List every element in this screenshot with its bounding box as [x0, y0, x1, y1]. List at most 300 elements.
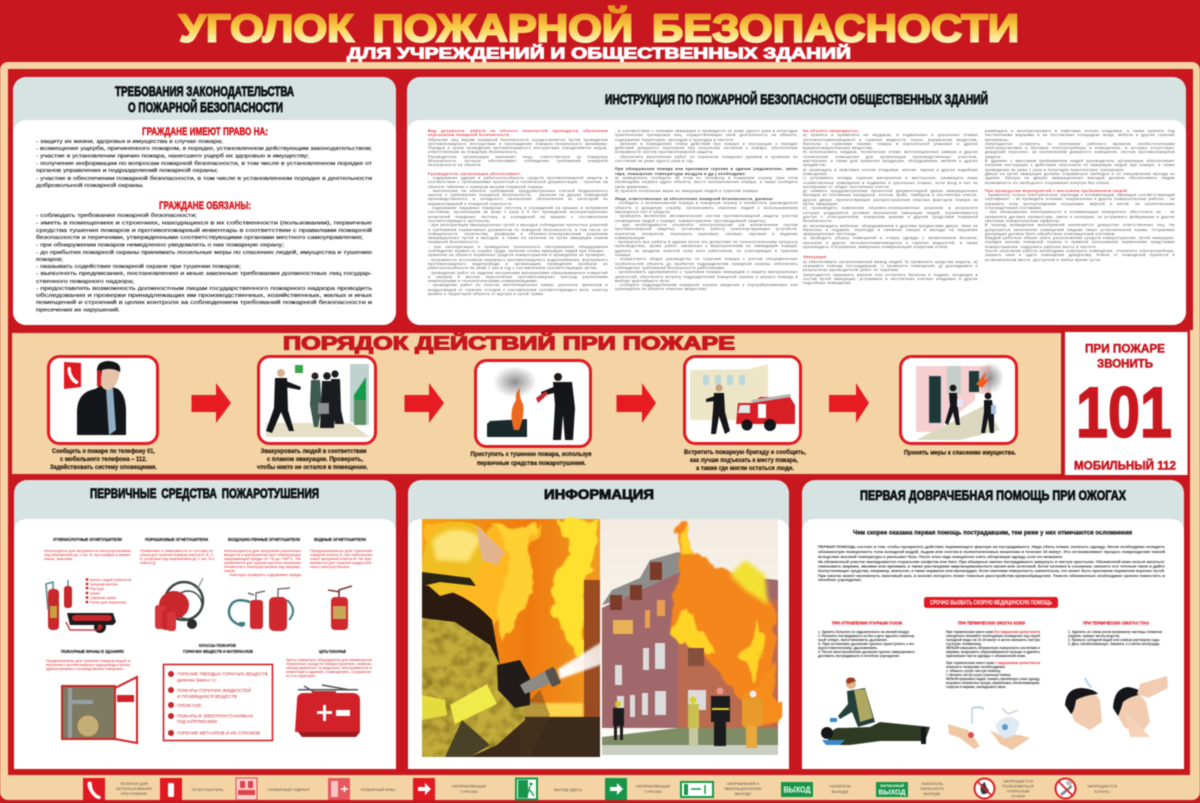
label: emergency exit: ЗАПАСНОГО — [920, 786, 944, 791]
section: skin burns: спиртом и жирами, накладывать мази. — [946, 685, 1006, 689]
text column 1: - проведение работ по очистке вентиляционных камер, циклонов, фильтров и воздуховодов от горючих отходов с составлением соответствующего акта; очистку кровли и территории объекта от мусора и сухой травы. — [428, 283, 608, 296]
step 4 caption: а также где могли остаться люди. — [696, 465, 794, 472]
panel: action order band — [12, 332, 1061, 474]
sign: extinguisher — [160, 778, 182, 800]
step 1 card — [48, 356, 158, 444]
section: carbon monoxide poisoning: ПРИ ОТРАВЛЕНИИ УГАРНЫМ ГАЗОМ — [832, 620, 902, 626]
subheading: citizens' duties: ГРАЖДАНЕ ОБЯЗАНЫ: — [159, 200, 251, 212]
section: fire shields: низированного пожарного инструмента и — [286, 666, 372, 670]
section: fire hydrants in buildings: ПОЖАРНЫЕ КРАНЫ В ЗДАНИЯХ — [61, 649, 125, 654]
list: fire classes: (древесина, бумага и т.п.) — [177, 678, 216, 682]
section: carbon monoxide poisoning: 4. После восстановления дыхания срочно эвакуировать — [818, 650, 916, 654]
call text: ЗВОНИТЬ — [1097, 358, 1153, 370]
text column 4: - при обнаружении неисправности в иллюминации немедленно обесточить ее; - не применять дуговые прожекторы, свечи и хлопушки, не устраивать фейерверки и другие световые пожароопасные эффекты; — [985, 210, 1175, 223]
title: УГОЛОК ПОЖАРНОЙ БЕЗОПАСНОСТИ — [179, 6, 1019, 50]
panel: first aid for burns — [802, 480, 1184, 769]
section: skin burns: кожного покрова необходимо: — [946, 665, 1006, 669]
section: foam extinguishers: Используются для загорания различных — [224, 549, 301, 553]
step 1 caption: с мобильного телефона – 112. — [60, 456, 147, 463]
text column 3: д) снимать предусмотренные проектной документацией двери эвакуационных выходов из поэтажных коридоров, холлов, фойе, тамбуров и лестничных клеток, другие двери, препятствующие распространению опасных факторов пожара на путях эвакуации; — [803, 189, 978, 206]
grey window — [947, 366, 961, 394]
icon: burning window with smoke — [969, 362, 1004, 394]
section: eye burns: 1. Удалить из глаза (если возможно) частицы пламени — [1068, 630, 1163, 634]
sign: hydrant — [236, 778, 257, 800]
legend: extinguisher parts: Сифонная трубка — [90, 596, 117, 600]
section: skin burns: вскрывать обожженные пузыри, обрабатывать обезболивающими, — [946, 681, 1040, 685]
section: powder extinguishers: Применяют в зависимости от состава по- — [140, 549, 215, 553]
step 2 caption: Эвакуировать людей в соответствии — [260, 448, 367, 455]
section: powder extinguishers — [140, 537, 215, 631]
panel: legal requirements — [13, 77, 396, 325]
subheading: first aid: Чем скорее оказана первая помощь пострадавшим, тем реже у них отмечаются осложнения — [853, 530, 1132, 536]
text column 2: - осуществить общее руководство по тушению пожара с учетом специфических особенностей объекта до прибытия подразделения пожарной охраны; обеспечить соблюдение требований безопасности работниками; — [615, 257, 798, 270]
list: fire classes — [168, 671, 268, 736]
label: fire hose: ПОЖАРНЫЙ КРАН — [361, 787, 396, 792]
step 1 caption — [50, 448, 157, 471]
text column 3 — [803, 129, 978, 315]
text column 3: г) устраивать склады горючих материалов и мастерские, размещать иные хозяйственные помещения в подвалах и цокольных этажах, если вход в них не изолирован от общих лестничных клеток; — [803, 176, 978, 189]
list: fire classes: ГОРЕНИЕ ТВЕРДЫХ ГОРЮЧИХ ВЕЩЕСТВ — [177, 672, 268, 676]
step 2 caption: с планом эвакуации. Проверить, — [267, 456, 363, 463]
label: exit here: ВЫХОД ЗДЕСЬ — [554, 787, 582, 792]
text column 2: - обеспечить выполнение работ по перекатке пожарных рукавов и проверке их состояния не реже одного раза в год. — [615, 155, 798, 163]
callout: call ambulance: СРОЧНО ВЫЗВАТЬ СКОРУЮ МЕДИЦИНСКУЮ ПОМОЩЬ — [930, 600, 1052, 606]
text column 3: в) размещать в лифтовых холлах кладовые, киоски, ларьки и другие подобные помещения; — [803, 168, 978, 176]
section: water extinguishers: газа и электроустановок. — [310, 565, 350, 569]
section: skin burns: При термическом ожоге кожи с нарушением целостности — [946, 661, 1041, 665]
step 5 caption: Принять меры к спасению имущества. — [904, 450, 1016, 456]
section: CO2 extinguishers — [44, 537, 132, 633]
section: eye burns: (окурков, горящих частиц веществ). — [1068, 634, 1120, 638]
step 5 card — [900, 356, 1016, 444]
label: evacuation exit: НАПРАВЛЕНИЕ К — [727, 781, 760, 786]
icon: water extinguisher — [328, 586, 352, 630]
section: fire hydrants in buildings — [46, 649, 137, 743]
text column 1: - содержание здания и работоспособность средств противопожарной защиты в соответствии с требованиями проектной и технической документации; - наличие на объекте табличек с номером вызова пожарной охраны; — [428, 176, 608, 189]
icon: evacuating group — [310, 370, 344, 428]
icon: exit sign — [295, 365, 303, 373]
section: foam extinguishers: нием. — [224, 569, 236, 573]
section: skin burns: ПРИ ТЕРМИЧЕСКИХ ОЖОГАХ КОЖИ — [958, 620, 1025, 626]
text column 1: - при эксплуатации эвакуационных путей и выходов соблюдение проектных решений и требований нормативных документов по пожарной безопасности, в том числе по освещенности, количеству, размерам и объемно-планировочным решениям эвакуационных путей и выходов, а также по наличию на путях эвакуации знаков пожарной безопасности; — [428, 223, 608, 244]
text block: duties list: пресечения их нарушений. — [36, 306, 120, 314]
arrow 4 — [829, 383, 869, 423]
heading: action order: ПОРЯДОК ДЕЙСТВИЙ ПРИ ПОЖАРЕ — [283, 332, 735, 354]
section: skin burns: немедленно начинайте необходимую охлаждение под струей — [946, 634, 1041, 638]
sign: exit: ВЫХОД — [784, 786, 811, 794]
section: powder extinguishers: рошка для тушения пожаров классов А, В, С, — [140, 553, 214, 557]
section: eye burns: 2. Промыть холодной водой или слабым раствором соды. — [1068, 638, 1160, 642]
label: no smoking — [1087, 784, 1117, 794]
step 3 caption: первичные средства пожаротушения. — [477, 460, 586, 467]
text block: duties list: - иметь в помещениях и строениях, находящихся в их собственности (пользовании), первичные — [36, 220, 372, 226]
icon: phone sign — [64, 362, 81, 389]
label: emergency exit: УКАЗАТЕЛЬ — [921, 781, 943, 786]
section: carbon monoxide poisoning: 2. Положить пострадавшего на бок и дать вдыхать нашатыр- — [818, 634, 916, 638]
arrow 3 — [616, 383, 656, 423]
text column 2: - прекратить все работы в здании (если это допустимо по технологическому процессу производства), кроме работ, связанных с мероприятиями по ликвидации пожара; удалить за пределы опасной зоны всех работников, не участвующих в тушении пожара; — [615, 240, 798, 257]
legend: extinguisher parts: Шланг — [90, 592, 101, 596]
illustration: hand under water and bandage — [948, 707, 1030, 750]
text column 3: Запрещается закрывать жалюзи или остеклять балконы и лоджии, входящие в состав путей эвакуации, устраивать в лестничных клетках кладовые и другие подсобные помещения. — [803, 272, 978, 285]
sign: green arrow — [605, 778, 627, 800]
text column 1: - при эксплуатации и проведении технического обслуживания оборудования соблюдение правил по охране труда, наличие схемы эвакуации людей при пожаре; - хранение на объекте первичных средств пожаротушения и проведение их проверки; — [428, 245, 608, 257]
legend: extinguisher parts: Ручка для переноски — [90, 600, 126, 604]
icon: smoke — [493, 366, 537, 398]
text column 1 — [428, 129, 608, 315]
step 2 caption — [257, 448, 368, 471]
section: carbon monoxide poisoning: 3. При остановке дыхания срочно приступить к ис- — [818, 642, 916, 646]
text block: first aid intro: болеутоляющие средства, например, анальгин, а также корвалол или валокордин. Если ожоговая поверхность значительна, это может быть признаком поражения верхних путей. — [818, 569, 1165, 573]
section: fire hydrants in buildings: Предназначены для тушения пожаров водой от — [46, 659, 131, 663]
heading: legal requirements: О ПОЖАРНОЙ БЕЗОПАСНОСТИ — [128, 98, 283, 115]
section: eye burns: ПРИ ТЕРМИЧЕСКИХ ОЖОГАХ ГЛАЗ — [1083, 620, 1149, 626]
section: foam extinguishers: применяются для тушения щелочно-земельных — [224, 561, 301, 565]
section: CO2 extinguishers: УГЛЕКИСЛОТНЫЕ ОГНЕТУШИТЕЛИ — [53, 537, 122, 542]
text block: rights list: - возмещение ущерба, причиненного пожаром, в порядке, установленном действующим законодательством; — [36, 145, 373, 152]
text column 4: В зданиях с массовым пребыванием людей руководитель организации обеспечивает наличие инструкции о действиях персонала по эвакуации людей при пожаре, а также проведение не реже 1 раза в полугодие практических тренировок. — [985, 159, 1175, 172]
label: green arrow: НАПРАВЛЯЮЩАЯ — [636, 784, 670, 788]
text column 2: - организовать одновременно с тушением пожара эвакуацию и защиту материальных ценностей; обеспечить встречу подразделений пожарной охраны и оказать помощь в выборе кратчайшего пути; — [615, 270, 798, 283]
room floor — [916, 405, 1000, 440]
list: fire classes: ПОЖАРЫ В ЭЛЕКТРОУСТАНОВКАХ — [177, 714, 253, 718]
text block: rights list: органов управления и подразделений пожарной охраны; — [36, 167, 219, 174]
section: eye burns — [1065, 620, 1168, 737]
sign: emergency exit: ВЫХОД — [878, 790, 906, 796]
label: red arrow: СТРЕЛКА — [460, 789, 478, 794]
label: green arrow: СТРЕЛКА — [644, 789, 662, 794]
text column 1: - исправность источников наружного противопожарного водоснабжения, внутреннего противопожарного водопровода и организацию проведения проверок их работоспособности не реже 2 раз в год с составлением соответствующих актов; — [428, 258, 608, 270]
text column 4: размещать и эксплуатировать в лифтовых холлах кладовые, а также хранить под лестничными маршами и на лестничных площадках вещи, мебель и другие горючие материалы. — [985, 129, 1175, 142]
text block: first aid intro: При ожогах может возникнуть ожоговый шок, в основе которого лежат тяжелые расстройства кровообращения. Тяжело обожженных необходимо срочно поместить в — [818, 574, 1166, 578]
text block: first aid intro: лечебное учреждение. — [818, 578, 862, 582]
section: CO2 extinguishers: под напряжением до 1 тыс. В, при пожарах в машин- — [44, 553, 132, 557]
heading: information: ИНФОРМАЦИЯ — [544, 486, 654, 502]
label: no open fire: ЗАПРЕЩАЕТСЯ — [1003, 778, 1033, 784]
text block: rights list: - защиту их жизни, здоровья и имущества в случае пожара; — [36, 139, 224, 145]
heading: instruction: ИНСТРУКЦИЯ ПО ПОЖАРНОЙ БЕЗОПАСНОСТИ ОБЩЕСТВЕННЫХ ЗДАНИЙ — [605, 90, 988, 107]
mobile number: МОБИЛЬНЫЙ 112 — [1074, 460, 1176, 472]
section: fire shields: ях и на территории. — [286, 674, 316, 678]
label: no open fire: ОТКРЫТЫМ — [1007, 788, 1029, 794]
label: evacuation exit: ВЫХОДУ — [735, 791, 752, 796]
sign: no open fire — [974, 778, 994, 798]
text column 1: - выполнение на объекте требований, предусмотренных статьей Федерального закона о требованиях пожарной безопасности; - наличие на дверях помещений производственного и складского назначения обозначения их категорий по взрывопожарной и пожарной опасности; — [428, 189, 608, 206]
label: fire phone: ТЕЛЕФОН ДЛЯ — [120, 781, 148, 786]
heading: first aid: ПЕРВАЯ ДОВРАЧЕБНАЯ ПОМОЩЬ ПРИ ОЖОГАХ — [860, 487, 1127, 503]
label: hydrant: ПОЖАРНЫЙ ГИДРАНТ — [268, 787, 311, 792]
illustration: face with eye rinse — [1065, 676, 1168, 737]
text column 3: а) обеспечивать организованный вывод людей, б) применять средства защиты, в) оказывать помощь пострадавшим, г) проверять помещения, д) докладывать о результатах руководителю работ по тушению. — [803, 260, 978, 272]
section: CO2 extinguishers: Используются для загорания на электроустановках — [44, 549, 131, 553]
section: water extinguishers: Предназначены для тушения — [310, 549, 372, 553]
text block: duties list: - до прибытия пожарной охраны принимать посильные меры по спасению людей, имущества и тушению — [36, 249, 372, 256]
icon: foam extinguishers — [229, 588, 293, 631]
section: foam extinguishers: элементов и электроустановок под напряже- — [224, 565, 302, 569]
legend: extinguisher parts: Раструб — [90, 587, 104, 591]
sign: exit — [781, 782, 813, 797]
sign: emergency exit — [876, 782, 908, 797]
text column 2: При обнаружении пожара или признаков горения в здании (задымление, запах гари, повышение температуры воздуха и др.) необходимо: — [615, 167, 798, 176]
text column 2: - проверить включение автоматических систем противопожарной защиты (систем оповещения людей о пожаре, пожаротушения, противодымной защиты); — [615, 214, 798, 223]
label: extinguisher: ОГНЕТУШИТЕЛЬ — [192, 787, 224, 792]
text column 3: з) проводить уборку помещений и стирку одежды с применением бензина, керосина и других легковоспламеняющихся и горючих жидкостей, а также производить отогревание замерзших коммуникаций открытым огнем; — [803, 236, 978, 249]
sign: fire phone — [83, 778, 105, 800]
text block: first aid intro — [818, 545, 1166, 582]
text column 3: ж) загромождать мебелью, оборудованием и другими предметами двери, люки на балконах и лоджиях, переходы в смежные секции и выходы на наружные эвакуационные лестницы; — [803, 224, 978, 236]
list: fire classes: ГОРЕНИЕ ГАЗОВ — [177, 703, 201, 708]
text column 1: Руководитель организации назначает лицо, ответственное за пожарную безопасность, которое обеспечивает соблюдение требований пожарной безопасности на объекте. — [428, 155, 608, 167]
label: no open fire — [1002, 778, 1034, 798]
label: no open fire: ПОЛЬЗОВАТЬСЯ — [1002, 784, 1034, 788]
text column 1: Вид документа: работа на объекте опасностей проводится обученным персоналом пожарной безопасности. — [428, 129, 608, 137]
text block: duties list: - соблюдать требования пожарной безопасности; — [36, 212, 198, 219]
text column 2: - в соответствии с планами эвакуации и проводится не реже одного раза в полугодие практическая тренировка лиц, осуществляющих свою деятельность на объекте; содержание территории, проходов и проездов в чистоте. — [615, 129, 798, 142]
text block: rights list: добровольной пожарной охраны. — [36, 182, 144, 189]
text block: duties list — [36, 212, 372, 314]
text block: first aid intro: обожженную поверхность тела холодной водой, льдом или снегом в полиэтиленовых мешочках в течение 10 минут. Это останавливает процесс повреждения тканей — [818, 550, 1166, 554]
callout: call ambulance — [924, 597, 1058, 608]
text block: first aid intro: На обожженный участок накладывается стерильная салфетка или бинт. При обширных ожогах пострадавшего завернуть в чистую простыню. Обожженной кожи нельзя касаться: — [818, 560, 1165, 564]
icon: dark door — [929, 376, 941, 423]
text block: first aid intro: вследствие высокой температуры и уменьшает боль. После этого надо немедленно снять обгоревшую одежду, если это возможно. — [818, 555, 1063, 559]
section: skin burns: прилипшие части одежды с обожженной кожи. — [946, 654, 1026, 658]
list: fire classes: ПОД НАПРЯЖЕНИЕМ — [177, 719, 217, 724]
step 3 card — [476, 360, 590, 446]
section: fire shields: ЩИТЫ ПОЖАРНЫЕ — [319, 649, 346, 654]
room wall — [916, 366, 991, 432]
section: skin burns: НЕЛЬЗЯ промывать водой, снимать прилипшую к коже одежду, — [946, 677, 1040, 681]
firefighter body — [422, 617, 525, 757]
text column 4 — [985, 129, 1175, 315]
text column 2: Лица, ответственные за обеспечение пожарной безопасности, должны: — [615, 197, 774, 201]
label: no smoking: КУРИТЬ — [1094, 789, 1110, 794]
icon: door — [350, 364, 369, 425]
section: skin burns: При термическом ожоге кожи без нарушения целостности — [946, 630, 1041, 634]
section: water extinguishers: ВОДНЫЕ ОГНЕТУШИТЕЛИ — [314, 537, 366, 542]
label: exit: ВЫХОДА — [832, 789, 849, 794]
arrow 2 — [404, 383, 444, 423]
section: skin burns — [945, 620, 1041, 750]
section: eye burns: 3. Дать обезболивающее. Закапать 1-2 капли альбуцида. — [1068, 642, 1160, 646]
icon: CO2 extinguishers — [46, 580, 116, 633]
section: water extinguishers — [310, 537, 373, 630]
text column 2: - сообщать подразделениям пожарной охраны сведения о перерабатываемых или хранящихся на объекте опасных веществах. — [615, 283, 798, 291]
text block: duties list: помещений и строений в целях контроля за соблюдением требований пожарной безопасности и — [36, 299, 372, 306]
text block: duties list: ственного пожарного надзора; — [36, 279, 135, 285]
text block: duties list: - выполнять предписания, постановления и иные законные требования должностных лиц государ- — [36, 271, 372, 277]
icon: man with extinguisher — [536, 373, 575, 440]
text block: duties list: - предоставлять возможность должностным лицам государственного пожарного надзора проводить — [36, 286, 372, 292]
section: fire shields: инвентаря в зданиях, помещениях, сооружени- — [286, 670, 373, 674]
glove and nozzle — [497, 660, 530, 708]
section: fire shields — [286, 649, 373, 737]
section: foam extinguishers: Ежегодно проверять содержимое заряда — [230, 573, 302, 577]
label: no open fire: ОГНЕМ — [1011, 794, 1025, 798]
section: fire classes — [164, 643, 272, 740]
panel: fire safety instruction — [407, 77, 1186, 325]
icon: people carrying property — [945, 385, 996, 433]
step 1 caption: Задействовать систему оповещения. — [50, 464, 157, 471]
text column 4: Запрещается оставлять по окончании рабочего времени необесточенными электроустановки и бытовые электроприборы в помещениях, в которых отсутствует дежурный персонал, за исключением дежурного освещения, систем противопожарной защиты. — [985, 142, 1175, 159]
section: fire shields: Щиты пожарные оборудуются для размещения — [286, 658, 372, 662]
section: skin burns: жирами, вскрывать образовавшиеся пузыри и удалять — [945, 650, 1041, 654]
text column 2: - сообщить о возникновении пожара в пожарную охрану и оповестить руководителя объекта и дежурную службу; организовать спасение людей с использованием имеющихся сил и средств; — [615, 201, 798, 214]
legend: extinguisher parts — [86, 578, 131, 604]
sign: no smoking — [1056, 778, 1076, 798]
text column 4: Двери на путях эвакуации должны открываться свободно и по направлению выхода из здания. Запоры на дверях эвакуационных выходов должны обеспечивать людям возможность их свободного открывания изнутри без ключа. — [985, 172, 1175, 185]
sign: exit here — [516, 778, 537, 800]
icon: hydrant cabinet — [62, 677, 137, 743]
legend: extinguisher parts: Баллон с жидкой углекислотой — [90, 578, 131, 582]
text column 4: Каждый работник обязан знать расположение средств пожаротушения, путей эвакуации, порядок вызова пожарной охраны и правила пользования первичными средствами пожаротушения, содержать рабочее место в чистоте. — [985, 236, 1175, 249]
section: carbon monoxide poisoning — [818, 620, 930, 745]
section: powder extinguishers: ПОРОШКОВЫЕ ОГНЕТУШИТЕЛИ — [145, 537, 208, 542]
section: foam extinguishers — [224, 537, 302, 631]
label: green arrow — [636, 784, 670, 794]
call text — [1085, 344, 1165, 370]
sign: evacuation exit — [681, 782, 713, 797]
icon: burning box — [487, 388, 527, 437]
section: carbon monoxide poisoning: ный спирт, восстановить дыхание. — [818, 638, 888, 642]
text block: first aid intro: ПЕРВАЯ ПОМОЩЬ состоит в том, чтобы прекратить действие поражающего фактора на пострадавшего. Надо сбить пламя, погасить одежду. Затем необходимо охладить — [818, 545, 1166, 549]
section: carbon monoxide poisoning: доставить пострадавшего в лечебное учреждение. — [818, 654, 900, 658]
label: emergency exit: ВЫХОДА — [924, 791, 941, 796]
text block: duties list: безопасности и перечнями, утвержденными соответствующими органами местного самоуправления; — [36, 235, 364, 241]
list: fire classes: И ПЛАВЯЩИХСЯ ВЕЩЕСТВ — [177, 694, 237, 699]
call text: ПРИ ПОЖАРЕ — [1085, 344, 1165, 356]
legend: extinguisher parts: Запорный вентиль — [90, 582, 118, 586]
text column 1: Обучение лиц мерам пожарной безопасности осуществляется путем проведения противопожарного инструктажа и прохождения пожарно-технического минимума. Порядок и сроки проведения противопожарного инструктажа определяются лицом, ответственным за пожарную безопасность. — [428, 138, 608, 154]
photo: burning building — [600, 519, 778, 755]
section: fire classes: КЛАССЫ ПОЖАРОВ — [199, 643, 237, 648]
text column 2 — [615, 129, 798, 315]
illustration: resuscitation — [821, 678, 930, 745]
text block: rights list: - участие в установлении причин пожара, нанесшего ущерб их здоровью и имуществу; — [36, 154, 310, 160]
text column 3: а) хранить и применять на чердаках, в подвальных и цокольных этажах легковоспламеняющиеся и горючие жидкости, порох, взрывчатые вещества, баллоны с горючими газами, товары в аэрозольной упаковке и другие взрывопожароопасные вещества; — [803, 133, 978, 150]
label: red arrow: НАПРАВЛЯЮЩАЯ — [452, 784, 486, 788]
text column 3: Эвакуация: — [803, 255, 828, 259]
label: fire phone: ПРИ ПОЖАРЕ — [121, 791, 148, 796]
legend: safety signs — [83, 778, 1117, 800]
text column 3: б) использовать чердаки, технические этажи, вентиляционные камеры и другие технические помещения для организации производственных участков, мастерских, а также для хранения продукции, оборудования, мебели и других предметов; — [803, 150, 978, 167]
section: powder extinguishers: класса Д. — [140, 561, 156, 565]
section: foam extinguishers: веществ и материалов при температуре — [224, 553, 301, 557]
section: carbon monoxide poisoning: 1. Удалить больного из задымленного на свежий воздух. — [818, 630, 910, 634]
text column 1: - содержание наружных пожарных лестниц и ограждений на крышах в исправном состоянии, организацию не реже 1 раза в 5 лет проведения эксплуатационных испытаний пожарных лестниц и ограждений на крышах с составлением соответствующего протокола; — [428, 206, 608, 223]
label: fire phone — [116, 781, 152, 796]
text block: rights list: - получение информации по вопросам пожарной безопасности, в том числе в установленном порядке от — [36, 160, 373, 167]
step 3 caption: Приступить к тушению пожара, используя — [470, 451, 592, 458]
text block: first aid intro: смазывать жирами, мазями или кремами, а также растворами марганцовокислого калия или зеленкой. Если человек в сознании, напоите его теплым чаем и дайте — [818, 564, 1165, 568]
icon: building — [690, 364, 768, 420]
icon: walking man — [266, 369, 301, 433]
icon: powder extinguishers — [155, 578, 203, 631]
text column 2: - при необходимости отключить электроэнергию (за исключением систем противопожарной защиты), остановить работу транспортирующих устройств, агрегатов, аппаратов, перекрыть сырьевые, газовые, паровые и водяные коммуникации; — [615, 223, 798, 240]
section: water extinguishers: меняются для тушения жидкостей, — [310, 561, 372, 565]
section: skin burns: НЕЛЬЗЯ смазывать обожженную поверхность кислотами и — [946, 646, 1041, 650]
step 3 caption — [470, 451, 592, 467]
text column 2: б) принять посильные меры по эвакуации людей и тушению пожара. — [615, 189, 759, 193]
step 2 caption: чтобы никто не остался в помещении. — [257, 464, 368, 471]
section: powder extinguishers: Е, установок под напряжением до 1 тыс. В и — [140, 557, 214, 561]
icon: man phoning — [77, 361, 126, 435]
number 101: 101 — [1076, 374, 1172, 453]
section: foam extinguishers: окружающей среды от +5 до +50°С. Не — [224, 557, 301, 561]
ground — [602, 728, 778, 755]
firefighters on ground — [613, 688, 763, 748]
label: emergency exit — [920, 781, 944, 796]
section: skin burns: 1. Обмыть сухую чистую повязку. — [946, 669, 1001, 673]
floor — [266, 423, 370, 437]
section: CO2 extinguishers: ных залах. — [44, 557, 74, 561]
section: skin burns: сухую повязку. — [946, 642, 982, 646]
text column 1: Руководитель организации обеспечивает: — [428, 172, 522, 176]
text column 2: - наличие в помещениях плана действий при пожаре и инструкции о порядке действий дежурного персонала при получении сигналов о пожаре; обеспечение исправности систем противопожарной защиты. — [615, 142, 798, 154]
label: evacuation exit — [724, 781, 763, 796]
step 2 card — [258, 356, 376, 444]
text column 4: После окончания работы необходимо осмотреть помещение, отключить электроприборы, закрыть окна и сдать помещение дежурному. Ключи от помещений хранятся в установленном месте, доступном в любое время суток. — [985, 249, 1175, 262]
text block: duties list: - при обнаружении пожаров немедленно уведомлять о них пожарную охрану; — [36, 242, 285, 248]
sign: emergency exit: ЗАПАСНЫЙ — [880, 784, 905, 788]
section: skin burns: холодной воды на 10-15 минут и затем наложить чистую — [946, 638, 1040, 642]
heading: legal requirements: ТРЕБОВАНИЯ ЗАКОНОДАТЕЛЬСТВА — [115, 83, 294, 99]
text block: duties list: пожаров; — [36, 257, 64, 263]
subheading: citizens' rights: ГРАЖДАНЕ ИМЕЮТ ПРАВО НА: — [142, 126, 268, 138]
text column 2: а) немедленно сообщить об этом по телефону в пожарную охрану (при этом необходимо назвать адрес объекта, место возникновения пожара, а также сообщить свою фамилию); — [615, 176, 798, 189]
panel: primary fire extinguishing means — [14, 480, 396, 769]
section: water extinguishers: пожаров класса А; при небольшом — [310, 553, 372, 557]
text block: rights list: - участие в обеспечении пожарной безопасности, в том числе в установленном порядке в деятельности — [36, 175, 372, 182]
section: carbon monoxide poisoning: кусственному дыханию. — [818, 646, 878, 650]
text column 4: В период проведения мероприятий назначается дежурство ответственных лиц. Не допускается заполнение помещений людьми сверх установленной нормы. Сгораемые декорации должны быть обработаны огнезащитным составом. — [985, 223, 1175, 236]
step 4 caption: как лучше подъехать к месту пожара, — [690, 457, 798, 464]
water jet — [558, 605, 666, 679]
text column 1: - проведение работ по заделке негорючими материалами образовавшихся отверстий и зазоров в местах пересечения противопожарных преград различными инженерными и технологическими коммуникациями; — [428, 270, 608, 283]
list: fire classes: ГОРЕНИЕ МЕТАЛЛОВ И ИХ СПЛАВОВ — [177, 730, 260, 736]
icon: fire truck — [736, 394, 795, 431]
text block: rights list — [36, 139, 373, 189]
sign: red arrow — [413, 778, 435, 800]
text block: duties list: обследования и проверки принадлежащих им производственных, хозяйственных, жилых и иных — [36, 292, 372, 299]
windows — [613, 600, 706, 718]
text column 4: - применять только электрические гирлянды и иллюминацию, имеющие соответствующий сертификат; - не проводить огневые, покрасочные и другие пожароопасные работы; - не украшать елку целлулоидными игрушками, марлей и ватой, не пропитанными огнезащитными составами; — [985, 193, 1175, 210]
label: fire phone: ИСПОЛЬЗОВАНИЯ — [116, 786, 152, 791]
text block: duties list: - оказывать содействие пожарной охране при тушении пожаров; — [36, 263, 242, 270]
section: water extinguishers: очаге загорания класса В. Не при- — [310, 557, 373, 561]
section: fire classes: ГОРЮЧИХ ВЕЩЕСТВ И МАТЕРИАЛОВ — [183, 649, 254, 654]
label: no smoking: ЗАПРЕЩАЕТСЯ — [1087, 784, 1117, 788]
panel: emergency number — [1065, 332, 1188, 475]
text column 3: е) производить изменения объемно-планировочных решений, в результате которых ухудшаются условия безопасной эвакуации людей, ограничивается доступ к огнетушителям, пожарным кранам и другим средствам пожарной безопасности; — [803, 206, 978, 223]
label: exit — [829, 784, 851, 794]
text column 3: На объекте запрещается: — [803, 129, 859, 133]
flames on building — [672, 522, 776, 700]
step 1 caption: Сообщить о пожаре по телефону 01, — [52, 448, 155, 455]
label: exit: УКАЗАТЕЛЬ — [829, 784, 851, 788]
list: fire classes: ПОЖАРЫ ГОРЮЧИХ ЖИДКОСТЕЙ — [177, 688, 251, 693]
section: foam extinguishers: ВОЗДУШНО-ПЕННЫЕ ОГНЕТУШИТЕЛИ — [228, 537, 300, 542]
heading: legal requirements — [115, 83, 294, 115]
sign: fire hose — [328, 778, 350, 800]
section: fire hydrants in buildings: административных и производственных помещениях. — [46, 667, 124, 671]
section: skin burns: 2. Наложить чистую сухую стерильную повязку. — [946, 673, 1011, 677]
step 4 caption — [684, 449, 806, 472]
icon: man meeting firefighters — [706, 384, 730, 434]
text column 4: При проведении мероприятий с массовым пребыванием людей: — [985, 189, 1129, 193]
subtitle: ДЛЯ УЧРЕЖДЕНИЙ И ОБЩЕСТВЕННЫХ ЗДАНИЙ — [347, 44, 851, 62]
heading: primary means: ПЕРВИЧНЫЕ СРЕДСТВА ПОЖАРОТУШЕНИЯ — [90, 485, 319, 501]
